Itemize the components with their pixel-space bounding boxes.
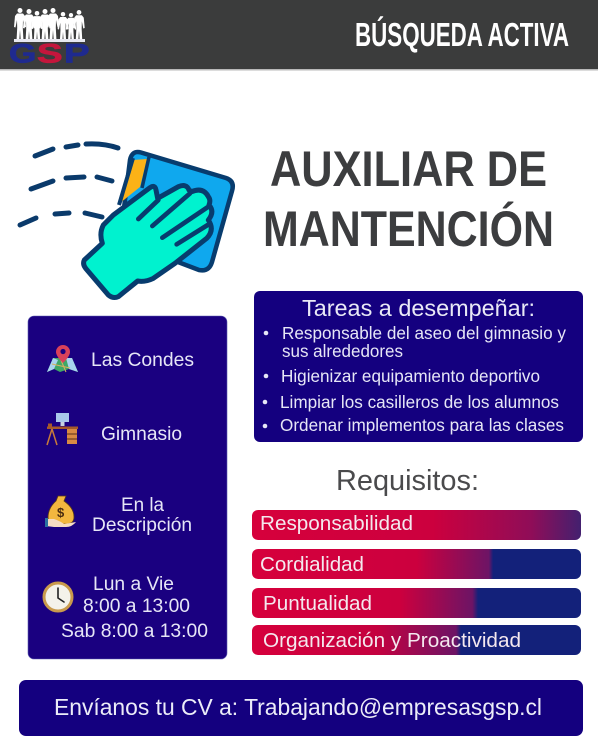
logo letters (9, 38, 90, 69)
bar: Cordialidad: Cordialidad (260, 553, 364, 576)
bar: Responsabilidad (252, 510, 581, 540)
icon: money bag in hand (45, 496, 76, 527)
task list: Higienizar equipamiento deportivo (281, 367, 540, 386)
bar: Puntualidad: Puntualidad (263, 592, 372, 615)
logo letters: S (37, 39, 63, 69)
location: Las Condes (91, 350, 194, 371)
main title: AUXILIAR DE (270, 141, 547, 197)
salary: En la (121, 495, 164, 516)
task list: Responsable del aseo del gimnasio y (282, 324, 566, 343)
main title (263, 141, 554, 257)
icon: money bag in hand: $ (57, 505, 65, 520)
task list (263, 324, 566, 435)
icon: gloved hand wiping with cloth (20, 144, 233, 298)
logo letters: P (64, 39, 90, 69)
icon: group of silhouettes (14, 8, 85, 42)
bar: Puntualidad (252, 588, 581, 618)
schedule: 8:00 a 13:00 (83, 596, 190, 617)
salary (92, 495, 192, 536)
cloth fold (119, 157, 149, 205)
tasks heading: Tareas a desempeñar: (302, 295, 535, 321)
bar: Organización y Proactividad: Organización y Proactividad (263, 629, 521, 652)
task list: Ordenar implementos para las clases (280, 416, 564, 435)
schedule: Lun a Vie (93, 574, 174, 595)
schedule: Sab 8:00 a 13:00 (61, 621, 208, 642)
motion dashes (20, 144, 118, 225)
requirements heading: Requisitos: (336, 465, 479, 497)
icon: map pin (47, 345, 78, 372)
workplace: Gimnasio (101, 424, 182, 445)
icon: desk with computer (47, 413, 78, 445)
bar: Cordialidad (252, 549, 581, 579)
cloth (120, 152, 233, 270)
logo: GSP (9, 8, 90, 69)
finger dividers (138, 193, 208, 244)
footer call to action (19, 680, 583, 736)
glove (84, 186, 212, 298)
header bar (0, 0, 598, 70)
schedule (61, 574, 208, 642)
task list: Limpiar los casilleros de los alumnos (280, 393, 559, 412)
icon: clock (44, 583, 72, 611)
bar: Responsabilidad: Responsabilidad (260, 512, 413, 535)
salary: Descripción (92, 515, 192, 536)
main title: MANTENCIÓN (263, 201, 554, 257)
panel: job details (28, 316, 227, 659)
task list: sus alrededores (282, 342, 403, 361)
requirement bars (252, 510, 581, 655)
panel: tasks (254, 291, 583, 442)
logo letters: G (9, 38, 36, 69)
footer call to action: Envíanos tu CV a: Trabajando@empresasgsp.cl (54, 694, 542, 720)
bar: Organización y Proactividad (252, 625, 581, 655)
